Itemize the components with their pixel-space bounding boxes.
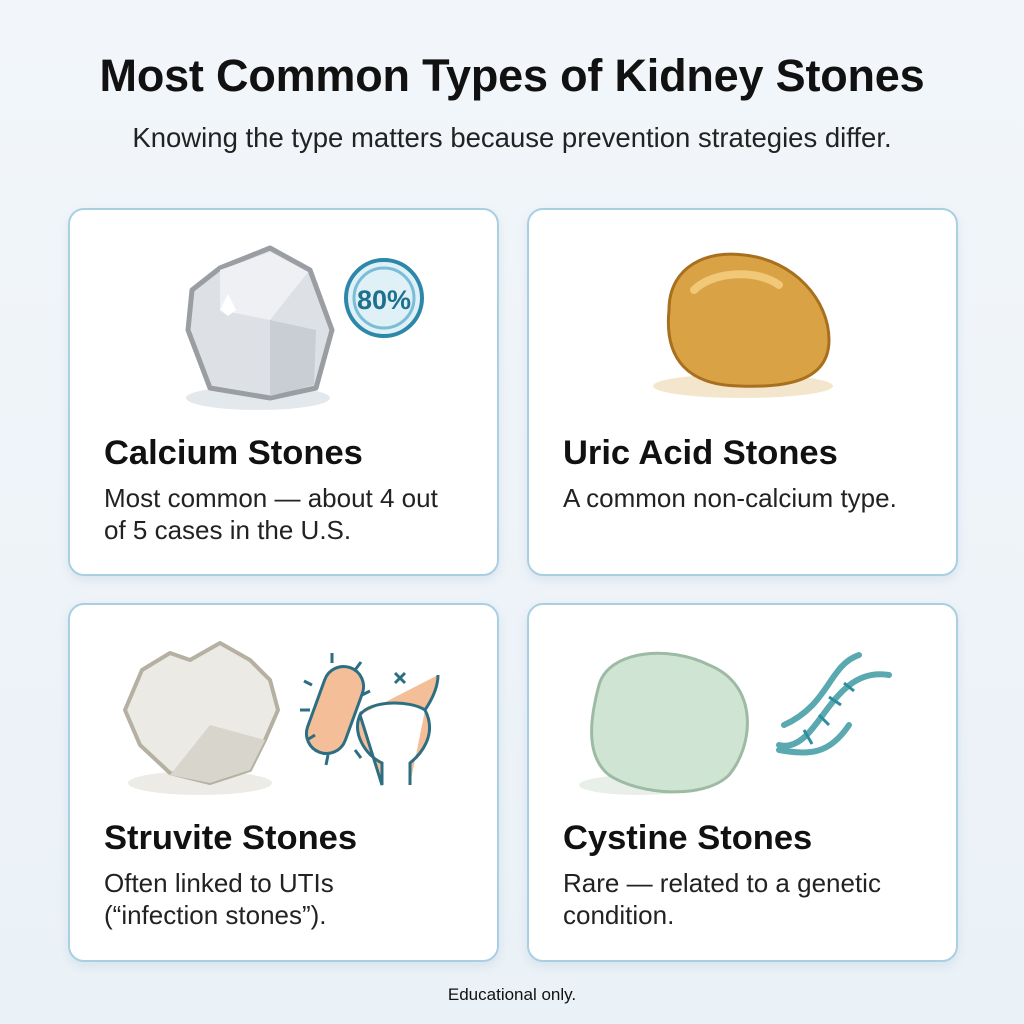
icon: cystine stone and DNA	[579, 652, 892, 795]
footer note: Educational only.	[448, 985, 576, 1004]
panel: cystine stones: condition.	[563, 900, 674, 930]
icon: calcium stone with 80%	[186, 246, 424, 410]
panel: calcium stones: Calcium Stones	[104, 434, 363, 472]
icon: struvite stone and bacteria	[123, 641, 440, 795]
subtitle: Knowing the type matters because prevention strategies differ.	[132, 122, 892, 153]
panel: cystine stones	[527, 603, 958, 962]
icon: uric acid stone	[653, 252, 833, 398]
panel: calcium stones	[68, 208, 499, 576]
panel: uric acid stones: A common non-calcium type.	[563, 483, 897, 513]
bladder	[358, 675, 438, 785]
panel: cystine stones: Rare — related to a genetic	[563, 868, 881, 898]
panel: cystine stones: Cystine Stones	[563, 819, 812, 857]
panel: uric acid stones	[527, 208, 958, 576]
panel: calcium stones: Most common — about 4 out	[104, 483, 438, 513]
panel: struvite stones: Often linked to UTIs	[104, 868, 334, 898]
panel: struvite stones	[68, 603, 499, 962]
title: Most Common Types of Kidney Stones	[100, 50, 924, 101]
panel: calcium stones: of 5 cases in the U.S.	[104, 515, 351, 545]
panel: uric acid stones: Uric Acid Stones	[563, 434, 838, 472]
panel: struvite stones: Struvite Stones	[104, 819, 357, 857]
panel: struvite stones: (“infection stones”).	[104, 900, 327, 930]
icon: calcium stone with 80%: 80%	[357, 285, 411, 315]
